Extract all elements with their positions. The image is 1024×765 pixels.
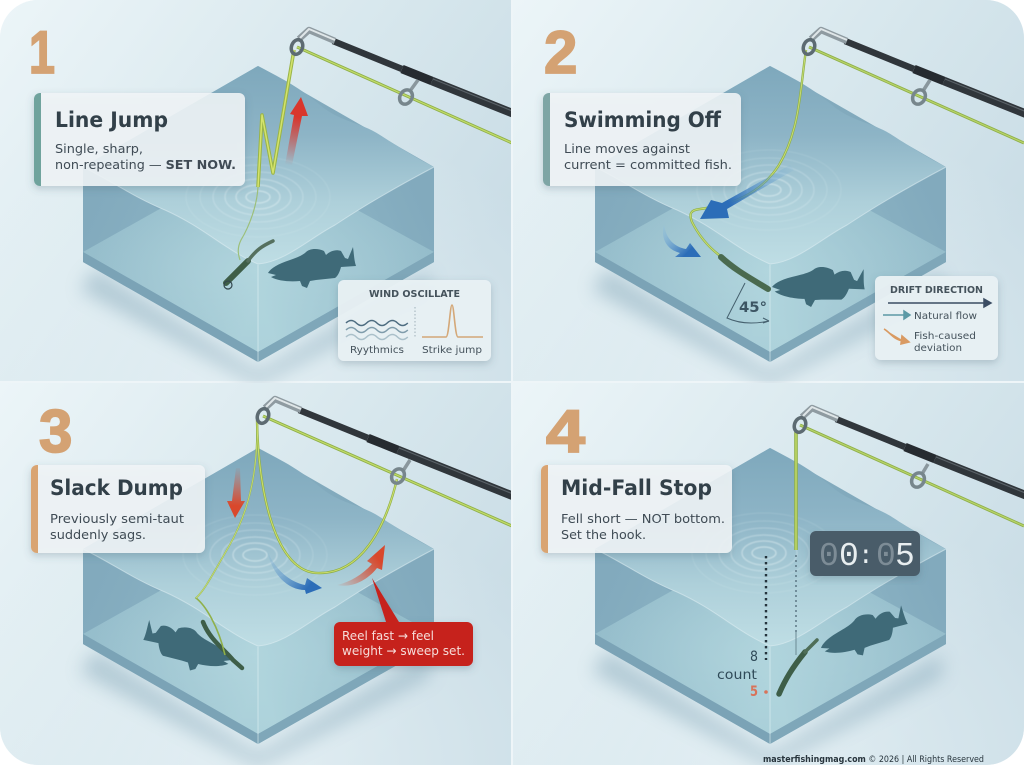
bass silhouette: [816, 605, 912, 663]
water cube: [592, 66, 946, 385]
water cube: [80, 66, 434, 385]
legend: drift direction: [875, 276, 998, 360]
bass silhouette: [772, 267, 865, 307]
rod guide: [389, 460, 410, 485]
legend: wind oscillate: [338, 280, 491, 361]
description: Previously semi-taut: [50, 511, 184, 526]
fishing rod: [792, 407, 1024, 509]
rod line: [800, 425, 1024, 526]
underwater line: [238, 187, 258, 260]
45 degree angle: [727, 283, 769, 323]
soft plastic worm: [779, 640, 817, 694]
arrow: drift: [888, 299, 991, 307]
depth count labels: 5: [750, 684, 758, 700]
description: Line moves against: [564, 141, 690, 156]
step number 2: 2: [544, 19, 577, 86]
water ripples: [692, 513, 836, 593]
depth count labels: [717, 649, 768, 700]
curved fishing line: [691, 50, 806, 255]
red up arrow: [285, 97, 308, 165]
card: mid-fall stop: [541, 465, 732, 553]
water ripples: [212, 164, 304, 222]
orange curved arrow: [337, 545, 385, 586]
heading: Line Jump: [55, 108, 168, 132]
slack fishing lines: [196, 420, 397, 655]
45 degree angle: 45°: [739, 300, 767, 316]
description line 2: Set the hook.: [561, 527, 646, 542]
label: natural flow: Natural flow: [914, 311, 977, 322]
digital timer: 0: [839, 538, 859, 575]
red down arrow: [227, 468, 245, 518]
heading: Slack Dump: [50, 476, 183, 500]
heading: Swimming Off: [564, 108, 722, 132]
soft plastic worm: [203, 622, 242, 668]
fall dotted line: [795, 555, 797, 632]
callout: reel fast: [334, 578, 473, 666]
panel: 1 line jump: [0, 0, 557, 385]
step number 3: 3: [39, 398, 72, 465]
legend title: DRIFT DIRECTION: [890, 285, 983, 296]
water cube: [80, 448, 434, 765]
water ripples: [724, 158, 814, 216]
description: Fell short — NOT bottom.: [561, 511, 725, 526]
callout text: Reel fast → feel: [342, 628, 434, 643]
depth count labels: 8: [750, 649, 758, 665]
rod guide: [910, 80, 930, 106]
step number 4: 4: [546, 398, 586, 465]
callout text line 2: weight → sweep set.: [342, 643, 465, 658]
step number 1: 1: [29, 19, 55, 86]
label: fish-caused: Fish-caused: [914, 331, 976, 342]
digital timer: :: [858, 541, 874, 571]
digital timer: [810, 531, 920, 576]
soft plastic worm: [224, 241, 273, 289]
card: swimming off: [543, 93, 741, 186]
digital timer: 5: [895, 538, 915, 575]
rod line: [297, 47, 512, 143]
blue deviation arrow: [663, 230, 701, 257]
blue curved arrow: [267, 550, 322, 594]
blue current arrow: [700, 165, 794, 219]
legend title: WIND OSCILLATE: [369, 289, 460, 300]
rod line: [263, 416, 512, 526]
icon: strike jump spike: [422, 305, 483, 337]
panel: 4 mid-fall stop: [513, 383, 1024, 765]
soft plastic worm: [721, 257, 768, 289]
digital timer: 0: [876, 538, 896, 575]
arrow: deviation: [884, 329, 909, 344]
water ripples: [183, 515, 327, 595]
icon: rhythmic waves: [346, 320, 408, 340]
description line 2: suddenly sags.: [50, 527, 146, 542]
bass silhouette: [140, 620, 236, 676]
label: deviation: deviation: [914, 343, 962, 354]
heading: Mid-Fall Stop: [561, 476, 712, 500]
label: rhythmics: Ryythmics: [350, 345, 404, 356]
panel: 2 swimming off: [513, 0, 1024, 385]
depth count labels: count: [717, 667, 757, 683]
jumping fishing line: [258, 50, 294, 187]
rod guide: [397, 80, 418, 106]
fishing rod: [801, 26, 1024, 118]
label: strike jump: Strike jump: [422, 345, 482, 356]
vertical fishing line: [794, 432, 798, 655]
description line 2: non-repeating — SET NOW.: [55, 157, 236, 172]
card: line jump: [34, 93, 245, 186]
panel: 3 slack dump: [0, 383, 523, 765]
arrow: natural flow: [883, 311, 910, 319]
count dotted line: [765, 556, 767, 660]
digital timer: 0: [819, 538, 839, 575]
card: slack dump: [31, 465, 205, 553]
description line 2: current = committed fish.: [564, 157, 732, 172]
footer copyright: masterfishingmag.com © 2026 | All Rights Reserved: [763, 755, 984, 765]
rod guide: [909, 464, 928, 489]
bass silhouette: [268, 247, 356, 288]
water cube: [592, 448, 946, 765]
rod line: [809, 47, 1024, 143]
description: Single, sharp,: [55, 141, 143, 156]
fishing rod: [289, 26, 511, 118]
fishing rod: [255, 398, 523, 500]
